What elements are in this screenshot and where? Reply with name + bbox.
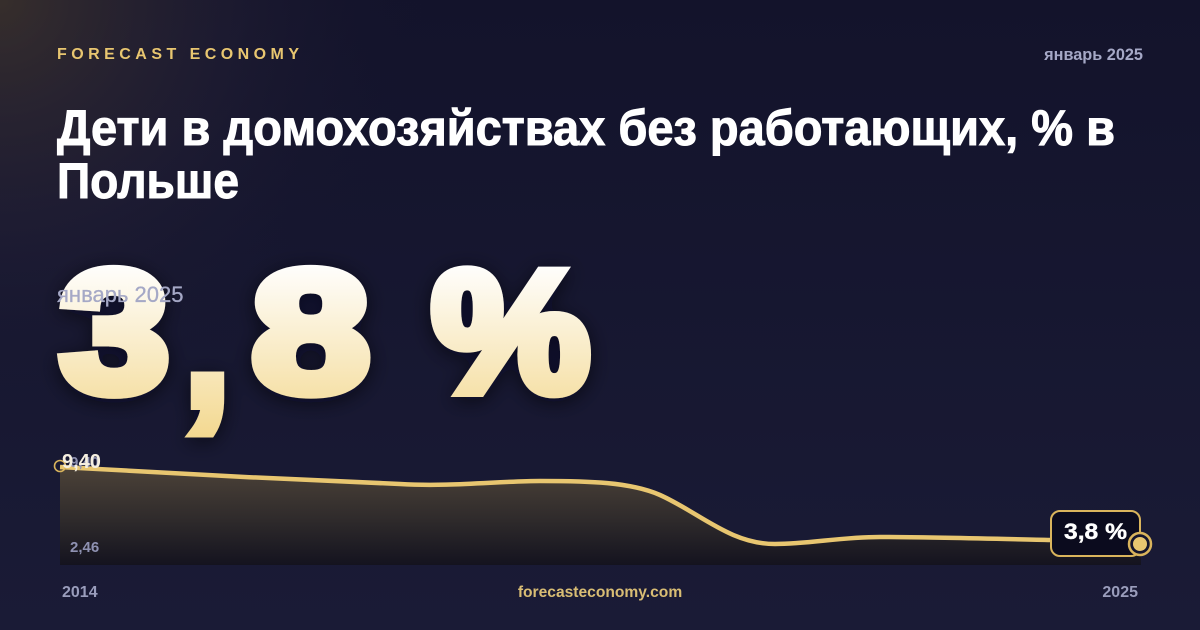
callout: 3,8 % [1064, 519, 1127, 544]
title: Дети в домохозяйствах без работающих, % в [57, 100, 1115, 156]
big value: , [185, 243, 230, 442]
max label: 9,40 [70, 454, 99, 471]
title [57, 100, 1115, 209]
source: forecasteconomy.com [518, 584, 682, 601]
big value: 3 [60, 236, 169, 428]
big value: % [432, 235, 590, 427]
date top right: январь 2025 [1043, 46, 1143, 64]
end marker [1129, 533, 1151, 555]
big value [60, 235, 590, 442]
area fill [60, 467, 1141, 565]
max label: 9,40 [62, 451, 101, 473]
callout [1051, 511, 1140, 556]
start marker [54, 460, 66, 472]
big value: 8 [252, 235, 370, 428]
brand label: FORECAST ECONOMY [57, 46, 299, 63]
trend line [60, 467, 1051, 544]
axis end year: 2025 [1102, 584, 1138, 601]
min label: 2,46 [70, 539, 99, 556]
value date overlay: январь 2025 [57, 282, 184, 307]
area chart [60, 467, 1141, 565]
title: Польше [57, 153, 239, 209]
axis start year: 2014 [62, 584, 98, 601]
